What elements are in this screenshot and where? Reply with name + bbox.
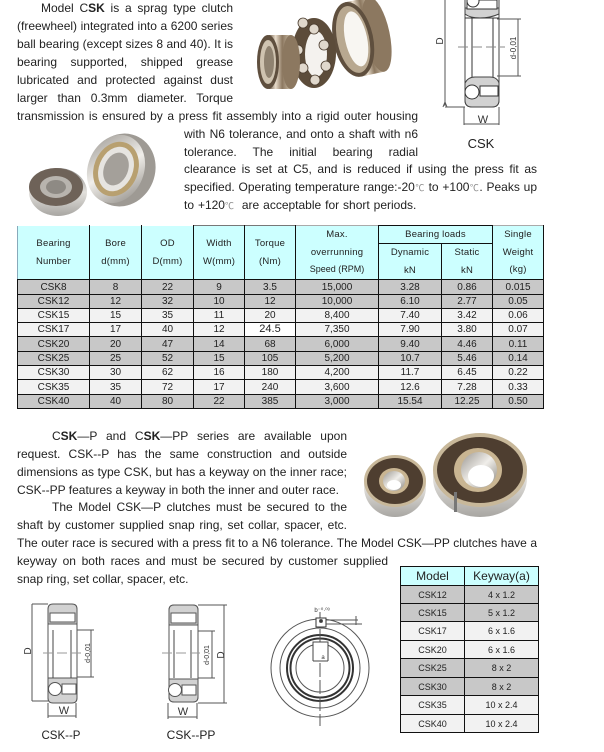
table: keyway sizes: Keyway(a) [473, 569, 530, 583]
table: bearing specifications: 52 [162, 353, 173, 364]
text: CSK-P and CSK-PP description: request. CSK--P has the same construction and outside [17, 447, 347, 461]
intro text: Model CSK description: specified. Operating temperature range:-20℃ to +100℃. Peaks up [184, 180, 537, 194]
table: bearing specifications: 7.90 [400, 324, 420, 335]
table: bearing specifications: 15.54 [397, 396, 423, 407]
table: bearing specifications: 7.40 [400, 310, 420, 321]
table: bearing specifications: 40 [162, 324, 173, 335]
table: bearing specifications: 105 [262, 353, 278, 364]
table: bearing specifications: CSK15 [38, 310, 69, 321]
diagram: CSK cross section: d-0,01 [509, 36, 518, 59]
text: CSK-P and CSK-PP description: dimensions as type CSK, but has a keyway on the inner race; [17, 465, 347, 479]
table: bearing specifications: 11 [214, 310, 224, 321]
table: keyway sizes: 8 x 2 [492, 682, 511, 692]
table: bearing specifications: 7.28 [457, 382, 477, 392]
table: keyway sizes: 8 x 2 [492, 663, 511, 673]
table: bearing specifications: CSK25 [38, 353, 69, 364]
text: CSK-P and CSK-PP description: CSK—P and CSK—PP series are available upon [52, 429, 347, 443]
intro text: Model CSK description: larger than 0.3mm diameter. Torque [17, 91, 233, 105]
table: bearing specifications: 12 [264, 296, 276, 307]
diagram: CSK--PP cross section: D [216, 651, 227, 659]
intro text: Model CSK description: tolerance. The initial bearing radial [184, 145, 418, 159]
table: bearing specifications: 6,000 [324, 338, 350, 350]
table: bearing specifications: Weight [503, 247, 533, 258]
text: CSK-P and CSK-PP description: keyway on both races and must be secured by customer supplied [17, 554, 388, 568]
table: bearing specifications: kN [461, 264, 473, 276]
table: bearing specifications: 16 [213, 367, 225, 378]
intro text: Model CSK description [17, 1, 537, 212]
intro text: Model CSK description: (freewheel) integrated into a 6200 series [17, 19, 233, 33]
table: bearing specifications: 4.46 [457, 338, 477, 350]
diagram: CSK--PP cross section: W [178, 706, 189, 718]
table: bearing specifications [17, 225, 544, 409]
table: keyway sizes: 6 x 1.6 [488, 644, 515, 654]
table: keyway sizes: 6 x 1.6 [488, 626, 515, 636]
table: bearing specifications: 15 [110, 310, 121, 321]
table: bearing specifications: 80 [162, 396, 173, 407]
table: bearing specifications: CSK20 [38, 338, 69, 350]
table: bearing specifications: 3.42 [457, 310, 477, 321]
table: bearing specifications: 3.80 [457, 324, 477, 335]
table: bearing specifications: 40 [110, 396, 121, 407]
intro text: Model CSK description: bearing supported, shipped grease [17, 55, 233, 69]
intro text: Model CSK description: lubricated and protected against dust [17, 73, 233, 87]
diagram: CSK--P cross section: D [23, 647, 34, 655]
table: bearing specifications: 17 [213, 382, 225, 392]
intro text: Model CSK description: with N6 tolerance, and onto a shaft with n6 [184, 127, 418, 141]
table: bearing specifications: 0.11 [509, 338, 527, 350]
table: bearing specifications: Dynamic [391, 247, 429, 258]
intro text: Model CSK description: transmission is ensured by a press fit assembly into a rigid outer housing [17, 109, 418, 123]
table: bearing specifications: 62 [162, 367, 173, 378]
table: bearing specifications: Single [504, 229, 532, 240]
intro text: Model CSK description: ball bearing (except sizes 8 and 40). It is [17, 37, 233, 51]
table: bearing specifications: CSK35 [38, 382, 69, 392]
label: CSK--PP: CSK--PP [167, 728, 215, 742]
table: bearing specifications: Number [36, 256, 71, 266]
table: bearing specifications: 12 [110, 296, 121, 307]
table: bearing specifications: CSK40 [38, 396, 69, 407]
table: bearing specifications: d(mm) [101, 256, 130, 266]
table: bearing specifications: 11.7 [401, 367, 419, 378]
table: bearing specifications: 22 [213, 396, 225, 407]
table: bearing specifications: 7,350 [324, 324, 350, 335]
table: bearing specifications: 0.07 [508, 324, 528, 335]
table: bearing specifications: 6.45 [457, 367, 477, 378]
table: bearing specifications: Bore [105, 238, 126, 249]
table: bearing specifications: 68 [264, 338, 276, 350]
table: keyway sizes: CSK35 [418, 700, 447, 710]
table: bearing specifications: Width [206, 238, 232, 249]
table: keyway sizes: CSK15 [418, 608, 447, 618]
table: bearing specifications: 12.25 [454, 396, 480, 407]
table: bearing specifications: 47 [162, 338, 173, 350]
label: CSK: CSK [468, 136, 494, 151]
table: bearing specifications: 5,200 [324, 353, 350, 364]
table: bearing specifications: 0.22 [508, 367, 528, 378]
table: bearing specifications: CSK12 [38, 296, 69, 307]
table: bearing specifications: 5.46 [457, 353, 477, 364]
diagram: CSK--P cross section: d-0,01 [85, 643, 92, 663]
table: keyway sizes: CSK40 [418, 718, 447, 728]
table: bearing specifications: 20 [110, 338, 121, 350]
table: bearing specifications: Torque [255, 238, 285, 249]
table: bearing specifications: CSK17 [38, 324, 69, 335]
table: bearing specifications: 25 [110, 353, 121, 364]
table: bearing specifications: overrunning [311, 247, 363, 258]
table: bearing specifications: 20 [264, 310, 276, 321]
table: bearing specifications: 15,000 [322, 282, 352, 292]
table: bearing specifications: 0.86 [457, 282, 477, 292]
table: bearing specifications: Static [455, 247, 479, 258]
table: bearing specifications: 385 [262, 396, 278, 407]
table: bearing specifications: Bearing loads [405, 228, 466, 240]
text: CSK-P and CSK-PP description [17, 429, 537, 586]
table: keyway sizes: 5 x 1.2 [488, 608, 515, 618]
diagram: CSK--P cross section: W [59, 705, 70, 717]
table: bearing specifications: 3.5 [263, 282, 277, 292]
table: bearing specifications: (kg) [509, 264, 527, 275]
table: bearing specifications: 0.33 [508, 382, 528, 392]
table: bearing specifications: Speed (RPM) [310, 264, 364, 274]
table: bearing specifications: OD [160, 238, 175, 249]
table: bearing specifications: 10.7 [400, 353, 420, 364]
table: keyway sizes: 10 x 2.4 [485, 718, 518, 728]
table: bearing specifications: 10,000 [322, 296, 352, 307]
table: bearing specifications: 0.015 [506, 282, 531, 292]
table: bearing specifications: (Nm) [259, 256, 281, 266]
text: CSK-P and CSK-PP description: The outer race is secured with a press fit to a N6 tolerance. The Model CSK—PP clutches have a [17, 536, 537, 550]
table: keyway sizes: CSK30 [418, 682, 447, 692]
table: bearing specifications: 180 [262, 367, 278, 378]
table: bearing specifications: 0.05 [508, 296, 528, 307]
text: CSK-P and CSK-PP description: The Model CSK—P clutches must be secured to the [52, 500, 347, 514]
table: keyway sizes: CSK25 [418, 663, 447, 673]
table: bearing specifications: Bearing [36, 238, 71, 249]
table: bearing specifications: 0.06 [508, 310, 528, 321]
table: bearing specifications: CSK30 [38, 367, 69, 378]
table: bearing specifications: 72 [162, 382, 173, 392]
table: bearing specifications: 3.28 [400, 282, 420, 292]
table: keyway sizes: 10 x 2.4 [485, 700, 518, 710]
table: bearing specifications: CSK8 [40, 282, 67, 292]
text: CSK-P and CSK-PP description: snap ring, set collar, spacer, etc. [17, 572, 188, 586]
table: bearing specifications: 35 [162, 310, 173, 321]
table: keyway sizes: 4 x 1.2 [488, 590, 515, 600]
table: bearing specifications: 32 [162, 296, 173, 307]
table: bearing specifications: W(mm) [203, 256, 235, 266]
table: bearing specifications: 8,400 [324, 310, 350, 321]
intro text: Model CSK description: clearance is set at C5, and is reduced if using the press fit as [184, 162, 537, 176]
table: bearing specifications: 4,200 [324, 367, 350, 378]
table: bearing specifications: 240 [262, 382, 278, 392]
diagram: CSK cross section: D [435, 37, 446, 45]
table: bearing specifications: 8 [113, 282, 118, 292]
table: bearing specifications: 0.14 [508, 353, 528, 364]
table: bearing specifications: Max. [326, 229, 348, 240]
table: bearing specifications: 3,600 [324, 382, 350, 392]
label: CSK--P: CSK--P [42, 730, 80, 742]
table: bearing specifications: 2.77 [457, 296, 477, 307]
diagram: CSK cross section: W [478, 114, 489, 126]
table: bearing specifications: 12 [213, 324, 225, 335]
table: bearing specifications: 30 [110, 367, 121, 378]
table: bearing specifications: 6.10 [400, 296, 420, 307]
intro text: Model CSK description: to +120℃ are acceptable for short periods. [184, 198, 416, 212]
table: bearing specifications: 14 [213, 338, 225, 350]
table: keyway sizes: CSK17 [418, 626, 447, 636]
table: bearing specifications: 9 [216, 282, 222, 292]
table: bearing specifications: 12.6 [400, 382, 420, 392]
table: bearing specifications: 17 [110, 324, 121, 335]
table: bearing specifications: 24.5 [259, 323, 281, 335]
table: bearing specifications: 15 [213, 353, 225, 364]
table: keyway sizes: CSK20 [418, 644, 447, 654]
intro text: Model CSK description: Model CSK is a sprag type clutch [41, 1, 233, 15]
diagram: CSK--PP cross section: d-0,01 [204, 645, 211, 665]
diagram: keyway front view: b⁻⁰·⁰³ [314, 607, 330, 614]
table: bearing specifications: 35 [110, 382, 121, 392]
table: bearing specifications: 22 [162, 282, 173, 292]
table: bearing specifications: kN [404, 264, 416, 276]
table: keyway sizes: Model [416, 569, 449, 583]
table: bearing specifications: D(mm) [152, 256, 182, 266]
text: CSK-P and CSK-PP description: shaft by customer supplied snap ring, set collar, spacer, etc. [17, 518, 347, 532]
text: CSK-P and CSK-PP description: CSK--PP features a keyway in both the inner and outer race. [17, 483, 339, 497]
table: bearing specifications: 3,000 [324, 396, 350, 407]
diagram: keyway front view: a [321, 655, 325, 661]
table: bearing specifications: 0.50 [508, 396, 528, 407]
table: keyway sizes: CSK12 [418, 590, 447, 600]
table: keyway sizes [400, 566, 539, 733]
table: bearing specifications: 10 [213, 296, 225, 307]
table: bearing specifications: 9.40 [400, 338, 420, 350]
